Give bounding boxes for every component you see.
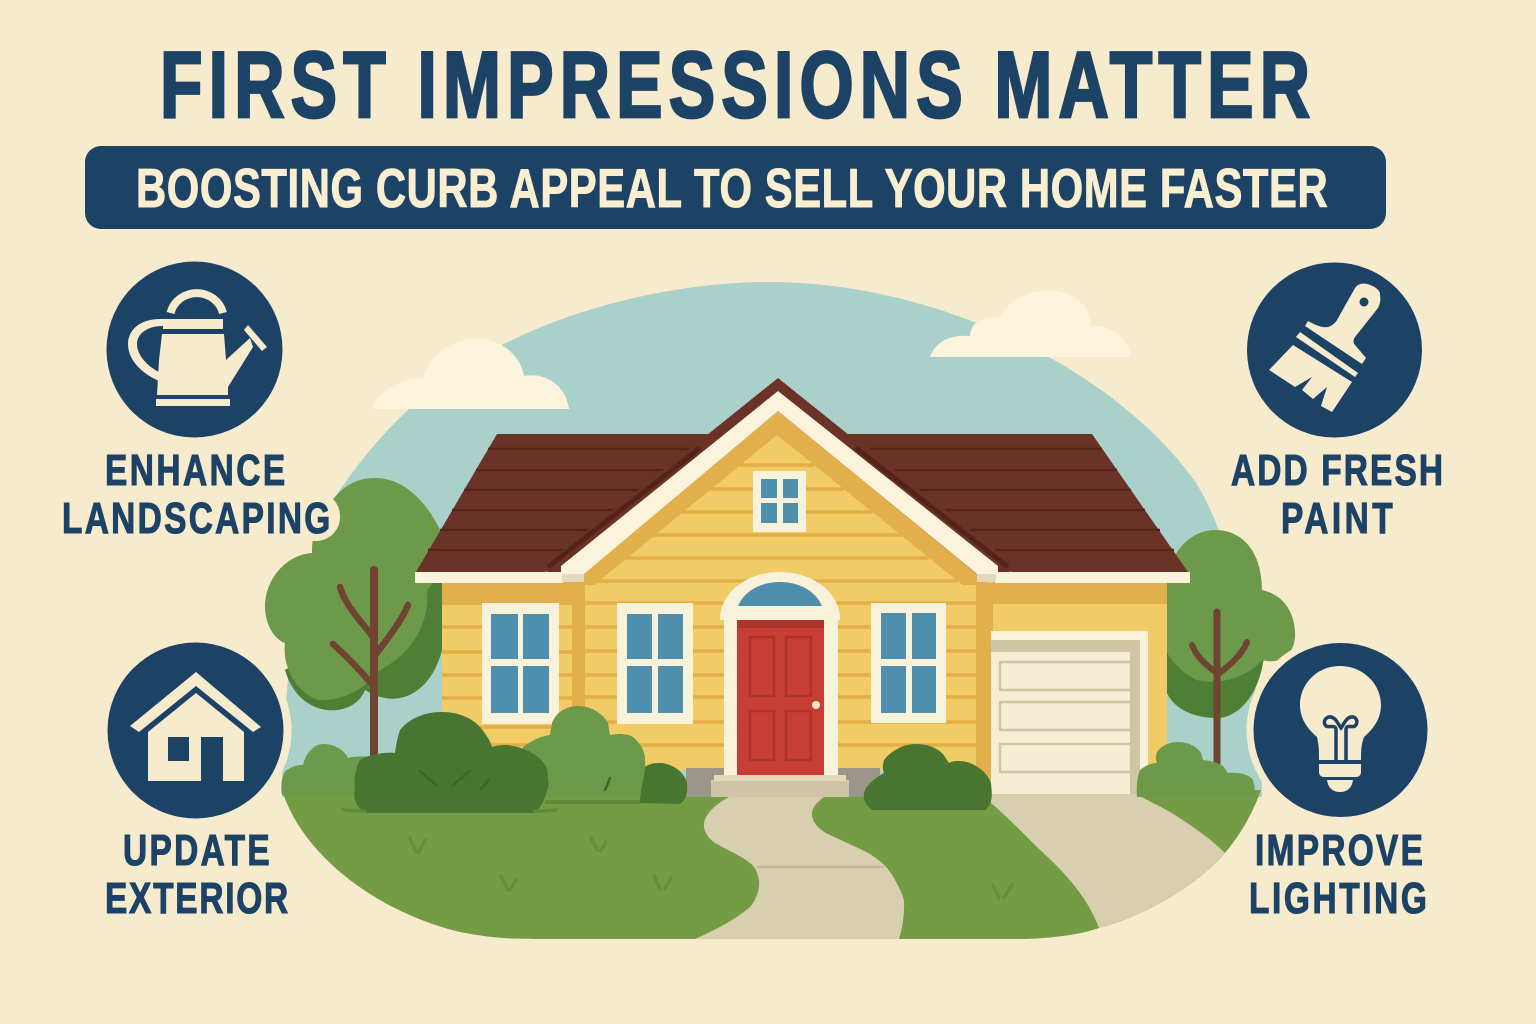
cloud right <box>930 290 1131 357</box>
shrubs <box>281 706 1255 813</box>
gable <box>570 411 990 585</box>
label: update exterior: UPDATE <box>123 827 270 875</box>
label: improve lighting <box>1249 827 1427 923</box>
shrub far left <box>281 744 375 795</box>
steps <box>711 775 849 797</box>
gable window <box>753 471 806 532</box>
label: add fresh paint: PAINT <box>1281 495 1393 543</box>
shrub large dark <box>354 712 548 813</box>
icon: house <box>108 642 284 818</box>
house <box>415 378 1190 797</box>
label: update exterior <box>105 827 288 923</box>
subtitle banner: BOOSTING CURB APPEAL TO SELL YOUR HOME FASTER <box>136 159 1328 219</box>
house scene <box>265 282 1295 939</box>
foundation <box>686 768 880 797</box>
shrub small dark <box>640 763 687 804</box>
walls <box>442 582 1167 770</box>
halo: landscaping label <box>50 492 340 541</box>
label: improve lighting: LIGHTING <box>1249 875 1427 923</box>
halo: right bottom icon <box>1246 636 1434 824</box>
icon: watering can <box>106 262 282 438</box>
halo: left bottom icon <box>100 634 292 826</box>
garage <box>991 631 1148 795</box>
subtitle banner <box>85 146 1386 229</box>
grass tufts <box>410 838 1012 898</box>
shrub centre dark <box>864 744 992 810</box>
title: FIRST IMPRESSIONS MATTER <box>160 32 1310 137</box>
label: update exterior: EXTERIOR <box>105 875 288 923</box>
shrub right <box>1137 742 1255 797</box>
right tree <box>1167 530 1295 763</box>
roof <box>416 434 710 572</box>
window right <box>871 603 946 723</box>
shrub medium <box>520 706 647 798</box>
cloud left <box>372 338 569 409</box>
icon: paintbrush <box>1247 262 1422 438</box>
grass <box>282 790 1261 939</box>
icon: light bulb <box>1254 643 1428 817</box>
label: enhance landscaping <box>62 447 330 543</box>
shrub leaf marks <box>420 771 912 797</box>
label: add fresh paint: ADD FRESH <box>1231 447 1443 495</box>
label: enhance landscaping: LANDSCAPING <box>62 495 330 543</box>
front walkway <box>695 797 904 939</box>
label: improve lighting: IMPROVE <box>1255 827 1423 875</box>
label: enhance landscaping: ENHANCE <box>105 447 285 495</box>
sky <box>282 282 1262 797</box>
driveway <box>991 794 1225 928</box>
door <box>720 572 840 777</box>
eaves and gable trim <box>415 391 1190 583</box>
window left <box>482 603 559 724</box>
window centre <box>617 603 693 724</box>
left tree <box>265 478 445 757</box>
label: add fresh paint <box>1231 447 1443 543</box>
